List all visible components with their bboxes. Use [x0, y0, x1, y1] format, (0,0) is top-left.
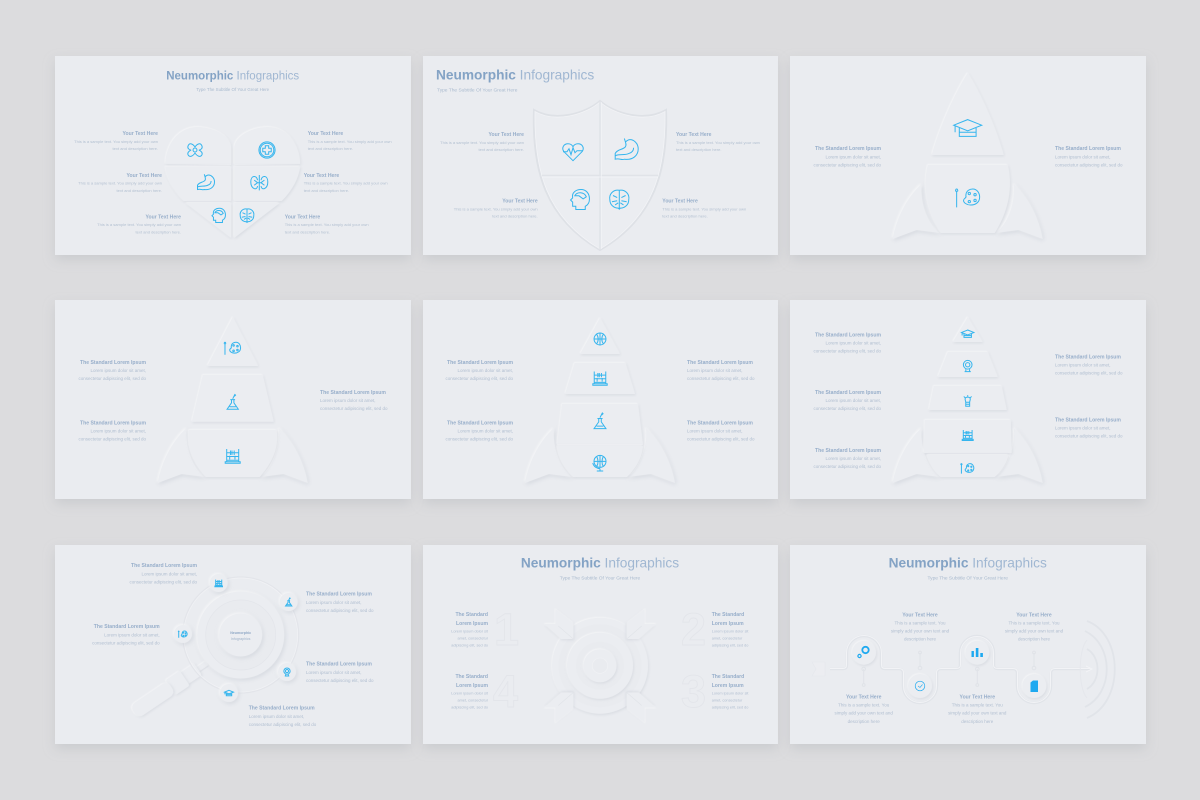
center label: Infographics	[231, 637, 251, 641]
text block: right 2: The Standard Lorem Ipsum	[1055, 418, 1121, 424]
text block 4: Lorem Ipsum	[456, 683, 488, 689]
icon: stomach	[615, 138, 638, 160]
number 1: 1	[494, 604, 519, 655]
text block: right 1: This is a sample text. You simply add your own	[676, 140, 760, 145]
magnifier rings	[183, 577, 299, 693]
node: palette	[174, 625, 192, 643]
text block: left 2	[445, 420, 513, 442]
target rings	[552, 618, 648, 714]
icon: palette	[224, 342, 241, 355]
text block: top 1: description here	[904, 637, 937, 642]
text block: left 2: Your Text Here	[127, 173, 162, 179]
text block: right 1	[676, 132, 760, 152]
icon: basketball	[594, 333, 606, 345]
text block 4: The Standard	[455, 674, 488, 680]
number 2: 2	[681, 604, 706, 655]
text block: right 2: Your Text Here	[304, 173, 339, 179]
text block: left 1: Lorem ipsum dolor sit amet,	[825, 340, 881, 346]
text block: left 1	[78, 360, 146, 381]
heart diagram	[165, 127, 300, 238]
text block 4: amet, consectetur	[457, 698, 489, 702]
text block: left 3: Your Text Here	[146, 214, 181, 220]
icon: kidneys	[251, 175, 268, 190]
icon: document	[1022, 674, 1046, 698]
text block: right 2: consectetur adipiscing elit, sed do	[1055, 434, 1123, 438]
target arcs	[1080, 621, 1115, 718]
text block: right 1: The Standard Lorem Ipsum	[687, 360, 753, 366]
rocket diagram	[158, 317, 308, 483]
text block: left 2	[454, 199, 538, 219]
text block: left 2: The Standard Lorem Ipsum	[815, 390, 881, 396]
text block 4	[451, 674, 489, 710]
text block: top 1: This is a sample text. You	[894, 621, 946, 626]
text block: left 2: This is a sample text. You simply add your own	[78, 180, 162, 186]
text block: left 1: Lorem ipsum dolor sit amet,	[457, 368, 513, 373]
icon: palette	[961, 464, 974, 474]
text block 1: The Standard	[455, 612, 488, 618]
text block: left 1: text and description here.	[113, 146, 158, 151]
text block: left 2: consectetur adipiscing elit, sed do	[813, 406, 881, 411]
text block 4: consectetur adipiscing elit, sed do	[306, 678, 374, 683]
text block: top 2: description here	[1018, 637, 1051, 642]
timeline path	[830, 636, 1092, 703]
text block: top 1	[891, 612, 950, 642]
text block: left: Lorem ipsum dolor sit amet,	[825, 154, 881, 160]
text block: left	[813, 146, 881, 168]
text block: left 1: Your Text Here	[489, 132, 524, 138]
text block: left 3: This is a sample text. You simply add your own	[97, 222, 181, 227]
node: bulb	[278, 663, 296, 681]
text block: right 3: Your Text Here	[285, 214, 320, 220]
text block: left 1: The Standard Lorem Ipsum	[815, 332, 881, 338]
text block: left: consectetur adipiscing elit, sed do	[813, 162, 881, 168]
text block: left 3: The Standard Lorem Ipsum	[815, 448, 881, 454]
text block: left 2	[813, 390, 881, 411]
icon: globe	[593, 455, 606, 471]
text block 5: Lorem ipsum dolor sit amet,	[249, 714, 304, 719]
icon: clock	[908, 674, 932, 698]
text block 2: The Standard	[712, 612, 744, 618]
text block: right 1: Your Text Here	[308, 131, 343, 137]
text block: left 3: consectetur adipiscing elit, sed do	[813, 464, 881, 469]
text block: left 2: text and description here.	[492, 214, 538, 219]
text block: right: consectetur adipiscing elit, sed do	[1055, 162, 1123, 168]
node: flask	[280, 593, 298, 611]
text block: right 1	[308, 131, 392, 151]
text block 4: adipiscing elit, sed do	[451, 706, 488, 710]
text block 3: consectetur adipiscing elit, sed do	[92, 640, 160, 646]
connector pins	[862, 651, 1036, 686]
text block: right 1: text and description here.	[676, 147, 721, 152]
rocket diagram	[893, 317, 1043, 483]
text block: right 1: Your Text Here	[676, 132, 712, 138]
text block: left 1	[445, 360, 513, 381]
arrow: top right	[627, 609, 656, 639]
shield diagram	[534, 101, 666, 250]
text block: left 2: consectetur adipiscing elit, sed do	[445, 436, 513, 442]
arrow: bottom right	[627, 692, 656, 722]
icon: abacus	[593, 372, 607, 385]
text block: left 1: consectetur adipiscing elit, sed do	[813, 348, 881, 354]
text block: right 2: Lorem ipsum dolor sit amet,	[687, 428, 743, 434]
text block: bottom 1: This is a sample text. You	[838, 703, 890, 708]
text block: right 2	[304, 173, 388, 193]
text block 1	[451, 612, 489, 648]
text block: right 2	[1055, 418, 1123, 438]
icon: medical plus	[259, 142, 275, 158]
icon: flask	[227, 394, 238, 409]
text block: left 1: text and description here.	[479, 147, 524, 152]
panel: rocket with three sections	[55, 300, 411, 499]
text block: left 2: Lorem ipsum dolor sit amet,	[825, 398, 881, 403]
text block: left 1	[440, 132, 524, 152]
text block: bottom 2	[948, 694, 1007, 724]
text block: right 1	[687, 360, 755, 381]
icon: gears	[852, 641, 876, 665]
text block: left 1	[813, 332, 881, 354]
text block 2: consectetur adipiscing elit, sed do	[306, 608, 374, 613]
text block 1: The Standard Lorem Ipsum	[131, 563, 197, 569]
text block: right	[1055, 146, 1123, 168]
text block: left 1: consectetur adipiscing elit, sed do	[78, 376, 146, 381]
text block 3: amet, consectetur	[712, 698, 743, 702]
text block 2: adipiscing elit, sed do	[712, 644, 748, 648]
subtitle: Type The Subtitle Of Your Great Here	[560, 575, 641, 581]
text block 2: amet, consectetur	[712, 636, 743, 640]
text block: right: consectetur adipiscing elit, sed do	[320, 406, 388, 411]
node: graduation cap	[220, 684, 238, 702]
text block: top 2: Your Text Here	[1016, 612, 1052, 618]
text block: bottom 1: Your Text Here	[846, 694, 882, 700]
number 3: 3	[681, 666, 706, 717]
text block 4: The Standard Lorem Ipsum	[306, 662, 372, 668]
icon: palette	[956, 189, 980, 207]
text block 1: Lorem Ipsum	[456, 621, 488, 627]
text block: left 2: text and description here.	[117, 188, 162, 193]
text block: right 2	[662, 199, 746, 219]
text block: left 2: This is a sample text. You simply add your own	[454, 207, 538, 212]
text block 2: Lorem ipsum dolor sit amet,	[306, 600, 362, 605]
icon: stomach	[198, 174, 214, 190]
subtitle: Type The Subtitle Of Your Great Here	[437, 87, 518, 93]
text block: bottom 2: simply add your own text and	[948, 711, 1007, 716]
text block 4: Lorem ipsum dolor sit amet,	[306, 670, 362, 675]
text block: right 2: This is a sample text. You simply add your own	[662, 207, 746, 212]
text block: right 2: The Standard Lorem Ipsum	[687, 420, 753, 426]
text block: top 1: simply add your own text and	[891, 629, 950, 634]
text block: right 2: This is a sample text. You simply add your own	[304, 180, 388, 186]
text block 2	[306, 592, 374, 613]
title: Neumorphic Infographics	[436, 68, 594, 82]
text block: right 2: consectetur adipiscing elit, sed do	[687, 436, 755, 442]
panel: rocket with four sections	[423, 300, 778, 499]
text block 1: Lorem ipsum dolor sit amet,	[141, 572, 197, 576]
text block 3	[712, 674, 749, 710]
icon: heart pulse	[563, 144, 583, 161]
text block 1: adipiscing elit, sed do	[451, 644, 488, 648]
text block: left 1: This is a sample text. You simply add your own	[74, 139, 158, 144]
title: Neumorphic Infographics	[889, 556, 1047, 571]
text block: left 2: The Standard Lorem Ipsum	[447, 420, 513, 426]
text block 2	[712, 612, 749, 648]
text block: left 1: Your Text Here	[123, 131, 158, 137]
arrow: top left	[544, 609, 573, 639]
icon: light bulb	[964, 395, 972, 406]
text block 4	[306, 662, 374, 683]
text block: left 2: The Standard Lorem Ipsum	[80, 420, 146, 426]
text block 1	[129, 563, 197, 584]
text block: right: Lorem ipsum dolor sit amet,	[1055, 154, 1111, 160]
text block: left 3	[813, 448, 881, 469]
title: Neumorphic Infographics	[166, 70, 299, 82]
node: abacus	[210, 574, 228, 592]
icon: head	[571, 190, 589, 209]
text block: right 1	[1055, 354, 1123, 376]
center label: Neumorphic	[230, 631, 251, 635]
text block 1: Lorem ipsum dolor sit	[451, 630, 489, 634]
text block: left: The Standard Lorem Ipsum	[815, 146, 881, 152]
icon: abacus	[225, 449, 240, 463]
text block: right: The Standard Lorem Ipsum	[320, 390, 386, 396]
text block: left 3	[97, 214, 181, 234]
panel: rocket with two sections	[790, 56, 1146, 255]
text block: right: Lorem ipsum dolor sit amet,	[320, 398, 376, 403]
text block: right 2: Lorem ipsum dolor sit amet,	[1055, 426, 1111, 430]
text block 5: consectetur adipiscing elit, sed do	[249, 722, 317, 727]
text block: right 2: text and description here.	[304, 188, 349, 193]
icon: bandage	[188, 144, 202, 156]
text block 5: The Standard Lorem Ipsum	[249, 706, 315, 712]
text block: bottom 2: Your Text Here	[960, 694, 995, 700]
text block: right 3	[285, 214, 369, 234]
text block: right 2: Your Text Here	[662, 199, 698, 205]
icon: brain	[240, 209, 254, 222]
text block 3: Lorem ipsum dolor sit	[712, 692, 749, 696]
icon: head	[212, 208, 225, 222]
panel: timeline to target	[790, 545, 1146, 744]
icon: flask	[594, 412, 606, 429]
icon: bar chart	[965, 641, 989, 665]
text block 4: Lorem ipsum dolor sit	[451, 692, 489, 696]
text block 3: The Standard Lorem Ipsum	[94, 624, 160, 630]
text block: right 1: text and description here.	[308, 146, 353, 151]
number 4: 4	[493, 666, 518, 717]
panel: rocket with five sections	[790, 300, 1146, 499]
panel: magnifying glass	[55, 545, 411, 744]
text block: right 1: Lorem ipsum dolor sit amet,	[1055, 362, 1111, 368]
text block: left 2: Your Text Here	[502, 199, 538, 205]
panel: shield infographic	[423, 56, 778, 255]
rocket diagram	[525, 318, 675, 483]
icon: brain	[610, 190, 629, 209]
text block: right 1: This is a sample text. You simply add your own	[308, 139, 392, 144]
text block: right 1: The Standard Lorem Ipsum	[1055, 354, 1121, 360]
text block: left 2	[78, 173, 162, 193]
subtitle: Type The Subtitle Of Your Great Here	[196, 87, 270, 92]
text block: right 3: text and description here.	[285, 230, 330, 234]
text block: left 2: Lorem ipsum dolor sit amet,	[90, 428, 146, 434]
text block: right 2: text and description here.	[662, 214, 708, 219]
panel: target with arrows	[423, 545, 778, 744]
text block 3: The Standard	[712, 674, 744, 680]
text block 3: Lorem ipsum dolor sit amet,	[104, 632, 160, 638]
text block: left 1: The Standard Lorem Ipsum	[80, 360, 146, 366]
text block: left 1: Lorem ipsum dolor sit amet,	[90, 368, 146, 373]
text block 2: Lorem ipsum dolor sit	[712, 630, 749, 634]
text block: left 1	[74, 131, 158, 151]
text block: left 2: Lorem ipsum dolor sit amet,	[457, 428, 513, 434]
text block: right 1: consectetur adipiscing elit, sed do	[687, 376, 755, 381]
text block: top 1: Your Text Here	[902, 612, 938, 618]
text block: left 3: Lorem ipsum dolor sit amet,	[825, 456, 881, 461]
icon: head globe	[963, 360, 972, 372]
text block 2: The Standard Lorem Ipsum	[306, 592, 372, 598]
text block: top 2: This is a sample text. You	[1008, 621, 1060, 626]
text block: right 1: consectetur adipiscing elit, sed do	[1055, 370, 1123, 376]
text block: bottom 2: description here	[961, 719, 994, 724]
text block: bottom 2: This is a sample text. You	[952, 703, 1003, 708]
text block: bottom 1: simply add your own text and	[835, 711, 893, 716]
text block: left 1: This is a sample text. You simply add your own	[440, 140, 524, 145]
text block 3: Lorem Ipsum	[712, 683, 744, 689]
text block: right 3: This is a sample text. You simply add your own	[285, 222, 369, 227]
magnifier handle	[129, 656, 212, 720]
title: Neumorphic Infographics	[521, 556, 679, 571]
text block: left 3: text and description here.	[136, 230, 181, 234]
text block 2: Lorem Ipsum	[712, 621, 744, 627]
text block 1: amet, consectetur	[457, 636, 489, 640]
chevron start	[812, 662, 825, 676]
text block 5	[249, 706, 317, 727]
icon: abacus	[962, 430, 973, 440]
arrow: bottom left	[544, 692, 573, 722]
text block 3: adipiscing elit, sed do	[712, 706, 748, 710]
text block: right	[320, 390, 388, 411]
text block: bottom 1: description here	[848, 719, 880, 724]
text block: left 2	[78, 420, 146, 442]
text block: right 1: Lorem ipsum dolor sit amet,	[687, 368, 743, 373]
icon: graduation cap	[954, 120, 982, 136]
text block: top 2: simply add your own text and	[1005, 629, 1064, 634]
panel: heart infographic	[55, 56, 411, 255]
icon: graduation cap	[962, 330, 974, 337]
text block 1: consectetur adipiscing elit, sed do	[129, 580, 197, 584]
text block: right: The Standard Lorem Ipsum	[1055, 146, 1121, 152]
center label	[230, 631, 251, 641]
text block: top 2	[1005, 612, 1064, 642]
rocket diagram	[893, 73, 1043, 239]
text block: left 1: consectetur adipiscing elit, sed do	[445, 376, 513, 381]
subtitle: Type The Subtitle Of Your Great Here	[927, 575, 1008, 581]
text block 3	[92, 624, 160, 646]
text block: bottom 1	[835, 694, 893, 724]
text block: left 2: consectetur adipiscing elit, sed do	[78, 436, 146, 442]
text block: right 2	[687, 420, 755, 442]
text block: left 1: The Standard Lorem Ipsum	[447, 360, 513, 366]
